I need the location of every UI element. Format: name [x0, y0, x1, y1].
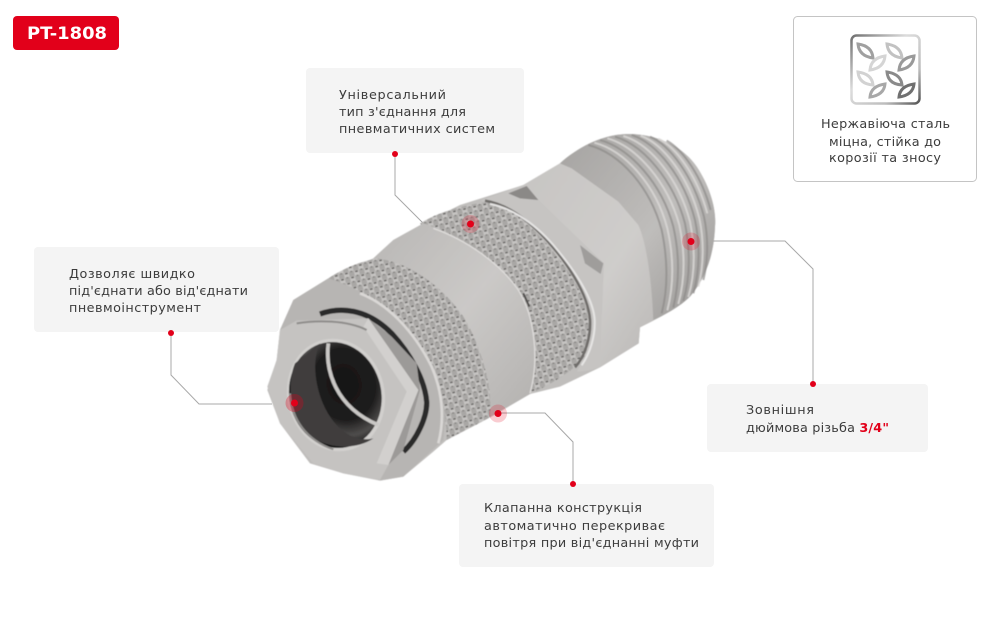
hotspot: thread — [682, 232, 700, 250]
panel: quick connect: пневмоінструмент — [69, 301, 202, 316]
silhouette — [267, 134, 715, 481]
product photo: pneumatic coupling — [267, 134, 715, 481]
rear hex body — [523, 163, 653, 367]
material text — [821, 117, 950, 166]
panel: valve design: повітря при від'єднанні муфти — [484, 536, 699, 551]
connector end dots — [168, 151, 816, 487]
panel: external thread: дюймова різьба 3/4" — [746, 421, 889, 436]
panel: valve design: Клапанна конструкція — [484, 501, 642, 516]
smooth collar — [373, 223, 535, 417]
panel: valve design — [459, 484, 714, 567]
hotspot: universal connection — [462, 215, 480, 233]
knurled sleeve rear — [420, 202, 592, 394]
panel: external thread: Зовнішня — [746, 403, 814, 418]
hotspot: bore — [286, 394, 304, 412]
bore — [276, 329, 396, 461]
model badge: PT-1808 — [27, 24, 107, 44]
panel: stainless steel material — [794, 16, 976, 182]
threaded end — [560, 134, 715, 322]
panel: universal connection: Універсальний — [339, 88, 446, 103]
panel: universal connection — [306, 68, 524, 153]
panel: universal connection: тип з'єднання для — [339, 105, 466, 120]
connector lines — [171, 154, 813, 484]
collar edge — [433, 228, 535, 393]
panel: valve design: автоматично перекриває — [484, 519, 665, 534]
icon: leaves on metal plate — [852, 36, 920, 104]
panel: quick connect — [34, 247, 279, 332]
panel: universal connection: пневматичних систем — [339, 122, 495, 137]
material text: корозії та зносу — [829, 151, 941, 166]
model badge — [13, 16, 119, 50]
hotspot: valve — [489, 404, 507, 422]
panel: quick connect: під'єднати або від'єднати — [69, 284, 248, 299]
hex flange — [480, 185, 604, 372]
material text: міцна, стійка до — [829, 135, 941, 150]
knurled sleeve front — [328, 258, 491, 440]
panel: quick connect: Дозволяє швидко — [69, 267, 195, 282]
rear nut facet — [368, 318, 420, 465]
front hex nut — [267, 318, 418, 480]
material text: Нержавіюча сталь — [821, 117, 950, 132]
panel: external thread — [707, 384, 928, 452]
front flange — [280, 278, 445, 481]
